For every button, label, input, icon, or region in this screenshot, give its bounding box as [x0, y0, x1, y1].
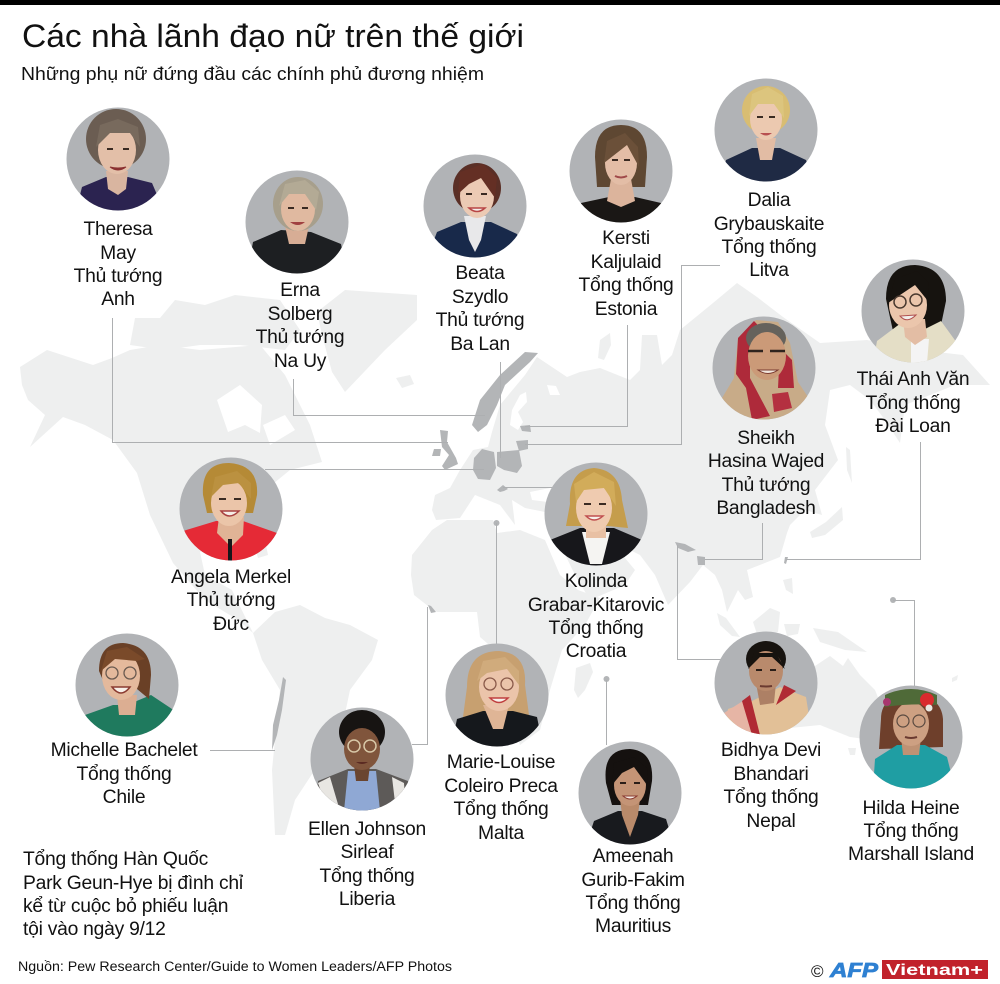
panel: Kersti Kaljulaid	[570, 120, 674, 320]
name: Kolinda Grabar-Kitarovic	[528, 571, 665, 662]
panel: Beata Szydlo	[424, 154, 526, 355]
portrait: Tsai Ing-wen	[862, 260, 964, 363]
name: Kolinda Grabar-Kitarovic: Grabar-Kitarovic	[528, 595, 665, 616]
name: Ellen Johnson Sirleaf	[308, 819, 426, 910]
name: Sheikh Hasina Wajed: Thủ tướng	[722, 475, 810, 496]
portrait: Kolinda Grabar-Kitarovic	[544, 462, 648, 566]
panel: Bidhya Devi Bhandari	[714, 632, 821, 832]
name: Kersti Kaljulaid: Estonia	[595, 299, 658, 320]
name: Sheikh Hasina Wajed: Sheikh	[737, 428, 795, 449]
portrait: Erna Solberg	[246, 170, 348, 274]
name: Michelle Bachelet: Chile	[103, 787, 145, 808]
note: Park Geun-Hye: tội vào ngày 9/12	[23, 919, 166, 940]
name: Erna Solberg: Solberg	[268, 304, 332, 325]
name: Theresa May: Theresa	[84, 219, 153, 240]
name: Kersti Kaljulaid: Kersti	[602, 228, 650, 249]
note: Park Geun-Hye: kể từ cuộc bỏ phiếu luận	[23, 895, 228, 917]
panel: Angela Merkel	[171, 458, 291, 635]
name: Ellen Johnson Sirleaf: Ellen Johnson	[308, 819, 426, 840]
name: Theresa May	[74, 219, 162, 310]
name: Dalia Grybauskaite: Dalia	[748, 190, 791, 211]
name: Dalia Grybauskaite	[714, 190, 824, 281]
name: Theresa May: May	[100, 243, 136, 264]
name: Beata Szydlo: Ba Lan	[450, 334, 510, 355]
name: Bidhya Devi Bhandari: Tổng thống	[723, 786, 819, 808]
name: Thái Anh Văn	[857, 369, 969, 437]
name: Beata Szydlo	[436, 263, 524, 355]
panel: Ameenah Gurib-Fakim	[578, 742, 685, 937]
name: Beata Szydlo: Szydlo	[452, 287, 508, 308]
name: Dalia Grybauskaite: Litva	[749, 260, 789, 281]
portrait: Beata Szydlo	[424, 154, 526, 258]
name: Hilda Heine: Marshall Island	[848, 844, 974, 865]
name: Bidhya Devi Bhandari	[721, 740, 821, 832]
name: Beata Szydlo: Beata	[455, 263, 505, 284]
name: Bidhya Devi Bhandari: Bidhya Devi	[721, 740, 821, 761]
name: Ameenah Gurib-Fakim: Gurib-Fakim	[581, 870, 685, 891]
logo: AFP Vietnam+	[811, 960, 988, 982]
portrait: Michelle Bachelet	[76, 634, 178, 737]
name: Michelle Bachelet: Michelle Bachelet	[51, 740, 198, 761]
portrait: Ameenah Gurib-Fakim	[578, 742, 682, 845]
name: Hilda Heine: Hilda Heine	[863, 798, 959, 819]
panel: Hilda Heine	[848, 686, 974, 865]
world map background	[20, 283, 990, 835]
panel: Michelle Bachelet	[51, 634, 198, 808]
name: Kolinda Grabar-Kitarovic: Tổng thống	[548, 617, 644, 639]
portrait: Marie-Louise Coleiro Preca	[446, 644, 548, 747]
name: Ameenah Gurib-Fakim: Mauritius	[595, 916, 671, 937]
panel: Dalia Grybauskaite	[714, 78, 824, 281]
portrait: Angela Merkel	[179, 458, 283, 561]
name: Angela Merkel: Đức	[213, 614, 249, 635]
name: Sheikh Hasina Wajed: Hasina Wajed	[708, 451, 824, 472]
logo: AFP Vietnam+: Vietnam+	[886, 962, 983, 979]
name: Kolinda Grabar-Kitarovic: Kolinda	[565, 571, 628, 592]
note: Park Geun-Hye: Tổng thống Hàn Quốc	[23, 848, 209, 870]
name: Erna Solberg: Thủ tướng	[256, 327, 344, 348]
source: Nguồn: Pew Research Center/Guide to Women Leaders/AFP Photos	[18, 959, 452, 974]
name: Erna Solberg: Na Uy	[274, 351, 327, 372]
title: Các nhà lãnh đạo nữ trên thế giới	[22, 18, 524, 54]
leader lines	[112, 266, 920, 750]
note: Park Geun-Hye	[23, 848, 244, 940]
name: Thái Anh Văn: Đài Loan	[875, 416, 951, 437]
highlighted countries	[272, 352, 896, 750]
panel: Marie-Louise Coleiro Preca	[444, 644, 558, 844]
note: Park Geun-Hye: Park Geun-Hye bị đình chỉ	[23, 873, 244, 894]
name: Kersti Kaljulaid: Tổng thống	[578, 274, 674, 296]
name: Marie-Louise Coleiro Preca: Marie-Louise	[447, 752, 555, 773]
name: Angela Merkel: Thủ tướng	[187, 590, 275, 611]
panel: Kolinda Grabar-Kitarovic	[528, 462, 665, 662]
portrait: Hilda Heine	[860, 686, 962, 789]
name: Beata Szydlo: Thủ tướng	[436, 310, 524, 331]
name: Ameenah Gurib-Fakim	[581, 846, 685, 937]
name: Kersti Kaljulaid	[578, 228, 674, 320]
name: Ellen Johnson Sirleaf: Sirleaf	[341, 842, 394, 863]
panel: Erna Solberg	[246, 170, 348, 372]
name: Bidhya Devi Bhandari: Nepal	[746, 811, 796, 832]
name: Erna Solberg	[256, 280, 344, 372]
portrait: Bidhya Devi Bhandari	[714, 632, 818, 735]
portrait: Dalia Grybauskaite	[714, 78, 818, 182]
panel: Ellen Johnson Sirleaf	[308, 708, 426, 910]
name: Marie-Louise Coleiro Preca	[444, 752, 558, 844]
name: Marie-Louise Coleiro Preca: Tổng thống	[453, 798, 549, 820]
name: Ameenah Gurib-Fakim: Ameenah	[593, 846, 673, 867]
name: Angela Merkel	[171, 567, 291, 635]
logo: AFP Vietnam+: ©	[811, 962, 824, 981]
logo: AFP Vietnam+: AFP	[829, 960, 879, 982]
name: Sheikh Hasina Wajed	[708, 428, 824, 519]
name: Angela Merkel: Angela Merkel	[171, 567, 291, 588]
name: Hilda Heine	[848, 798, 974, 865]
name: Thái Anh Văn: Tổng thống	[865, 392, 961, 414]
subtitle: Những phụ nữ đứng đầu các chính phủ đương nhiệm	[21, 63, 484, 84]
name: Marie-Louise Coleiro Preca: Malta	[478, 823, 524, 844]
name: Theresa May: Anh	[101, 289, 135, 310]
name: Ellen Johnson Sirleaf: Tổng thống	[319, 865, 415, 887]
portrait: Ellen Johnson Sirleaf	[310, 708, 414, 811]
portrait: Sheikh Hasina	[712, 316, 816, 420]
name: Hilda Heine: Tổng thống	[863, 820, 959, 842]
name: Kolinda Grabar-Kitarovic: Croatia	[566, 641, 627, 662]
portrait: Kersti Kaljulaid	[570, 120, 672, 223]
name: Thái Anh Văn: Thái Anh Văn	[857, 369, 969, 390]
name: Theresa May: Thủ tướng	[74, 266, 162, 287]
name: Sheikh Hasina Wajed: Bangladesh	[716, 498, 816, 519]
name: Erna Solberg: Erna	[280, 280, 320, 301]
name: Ellen Johnson Sirleaf: Liberia	[339, 889, 396, 910]
panel: Thái Anh Văn	[857, 260, 969, 437]
name: Kersti Kaljulaid: Kaljulaid	[591, 252, 661, 273]
name: Dalia Grybauskaite: Tổng thống	[721, 236, 817, 258]
name: Michelle Bachelet	[51, 740, 198, 808]
name: Marie-Louise Coleiro Preca: Coleiro Preca	[444, 776, 558, 797]
portrait: Theresa May	[66, 108, 170, 211]
name: Bidhya Devi Bhandari: Bhandari	[733, 764, 809, 785]
panel: Theresa May	[66, 108, 170, 310]
name: Ameenah Gurib-Fakim: Tổng thống	[585, 892, 681, 914]
name: Michelle Bachelet: Tổng thống	[76, 763, 172, 785]
name: Dalia Grybauskaite: Grybauskaite	[714, 214, 824, 235]
panel: Sheikh Hasina Wajed	[708, 316, 824, 519]
